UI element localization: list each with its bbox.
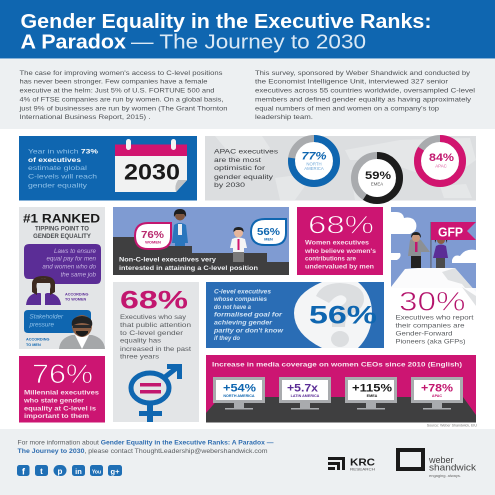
caption: non-C-level executives: interested in attaining a C-level position — [119, 265, 258, 272]
stat: 30% — [391, 286, 476, 348]
donut: North America 77%: NORTH — [306, 162, 322, 166]
donut: North America 77%: 77% — [302, 150, 327, 162]
label: according to women: ACCORDING — [65, 292, 88, 296]
bubble: 56% men: 56% — [257, 227, 280, 238]
text: year in which 73%: estimate global — [28, 165, 88, 172]
intro text: left column: executive at the helm: Just 5% of U.S. FORTUNE 500 and — [20, 88, 215, 94]
text: executives who say: three years — [120, 354, 160, 360]
text: APAC executives: gender equality — [214, 174, 274, 181]
text: C-level executives: parity or don't know — [213, 328, 284, 334]
monitor: Latin America +5.7x: LATIN AMERICA — [291, 394, 320, 398]
text: APAC executives: are the most — [214, 157, 261, 164]
logo: Weber Shandwick: weber — [428, 455, 454, 465]
stat: 68%: 68% — [308, 212, 374, 240]
panel: 76% millennial — [19, 356, 105, 422]
bubble: according to women — [24, 244, 101, 284]
panel: 56% no formalised goal — [206, 282, 384, 348]
source note: Source: Weber Shandwick, EIU — [427, 424, 477, 428]
text: gender-forward pioneers — [396, 314, 474, 346]
label: according to women: TO WOMEN — [65, 298, 86, 302]
donut: EMEA 59%: EMEA — [371, 182, 383, 186]
text: executives who say: that public attention — [120, 322, 191, 329]
figure: woman on podium — [172, 209, 188, 246]
monitor: Latin America +5.7x: +5.7x — [287, 382, 319, 394]
text: executives who say: to C-level gender — [120, 330, 184, 337]
text: executives who say: Executives who say — [120, 314, 187, 321]
text: gender-forward pioneers: Executives who report — [396, 314, 474, 322]
text: year in which 73%: of executives — [28, 157, 81, 164]
world map silhouette — [215, 136, 476, 200]
text: millennial executives: equality at C-level is — [24, 406, 97, 412]
label: according to men: ACCORDING — [26, 338, 49, 342]
text: APAC executives — [214, 148, 279, 189]
figure: man with flag — [408, 232, 430, 268]
text: C-level executives: whose companies — [214, 296, 267, 303]
social icons: f — [22, 466, 26, 478]
text: women executives: contributions are — [305, 256, 357, 262]
text: APAC executives: by 2030 — [214, 182, 245, 189]
monitor: EMEA +115%: EMEA — [367, 394, 378, 398]
donut: North America 77% — [292, 138, 336, 184]
intro text: left column — [18, 70, 228, 121]
text: APAC executives: optimistic for — [214, 165, 266, 172]
figure: woman with flag — [433, 233, 448, 268]
footer contact text — [18, 440, 274, 455]
monitor: APAC +78%: APAC — [432, 394, 442, 398]
donut: APAC 84%: 84% — [429, 152, 454, 164]
white circle with question mark — [294, 282, 372, 348]
intro text: right column — [255, 70, 476, 121]
text: women executives: Women executives — [305, 240, 370, 246]
logo: KRC Research: RESEARCH — [350, 468, 375, 472]
panel: 2030 calendar — [19, 136, 197, 200]
text: year in which 73%: Year in which 73% — [28, 148, 98, 156]
monitor: North America +54% — [213, 377, 265, 410]
monitor: EMEA +115% — [345, 377, 397, 410]
text: year in which 73%: gender equality — [28, 182, 88, 190]
heading: #1 ranked: #1 RANKED — [23, 212, 100, 226]
text: millennial executives: important to them — [24, 413, 90, 420]
title: A Paradox — [20, 32, 126, 54]
intro text: right column: members and defined gender equality as having approximately — [255, 96, 472, 104]
text: APAC executives: APAC executives — [214, 148, 279, 156]
icon: woman — [26, 276, 61, 305]
text: women executives: undervalued by men — [305, 264, 374, 270]
monitor: North America +54%: +54% — [223, 382, 256, 394]
title — [20, 11, 432, 54]
text: C-level executives: if they do — [214, 335, 240, 342]
bubble: 56% men — [251, 219, 286, 245]
panel: 68% public attention — [113, 282, 199, 422]
bubble: according to women: and women who do — [42, 264, 97, 270]
social icons — [17, 465, 122, 478]
mountain — [391, 268, 476, 306]
footer band — [0, 429, 495, 495]
text: C-level executives: C-level executives — [214, 288, 272, 296]
social icons: You — [92, 470, 101, 476]
text: executives who say: equality has — [120, 338, 162, 344]
monitor: North America +54%: NORTH AMERICA — [223, 394, 255, 398]
intro text: right column: executives across 55 countries worldwide, oversampled C-level — [255, 88, 476, 94]
text: millennial executives: who state gender — [23, 398, 85, 404]
title: — The Journey to 2030 — [131, 32, 366, 54]
bubble: according to men — [24, 310, 91, 333]
caption: non-C-level executives — [119, 256, 258, 272]
logo: Weber Shandwick: shandwick — [429, 462, 477, 472]
bubble: according to women: equal pay for men — [46, 256, 97, 262]
text: gender-forward pioneers: Pioneers (aka GFPs) — [396, 338, 466, 346]
panel: #1 ranked tipping point — [19, 207, 105, 349]
bubble: 76% women: 76% — [141, 230, 164, 241]
donut: EMEA 59% — [354, 156, 400, 200]
donut: APAC 84%: APAC — [435, 164, 447, 168]
flag: GFP: GFP — [438, 224, 463, 240]
text: C-level executives: do not have a — [214, 304, 251, 311]
text: women executives — [304, 240, 377, 270]
monitor: APAC +78%: +78% — [421, 382, 453, 394]
text: year in which 73%: C-levels will reach — [28, 174, 97, 180]
figure: man on step — [230, 227, 247, 262]
panel: GFP summit illustration — [391, 207, 476, 306]
footer contact text: For more information about Gender Equality in the Executive Ranks: A Paradox — — [18, 440, 274, 446]
intro text: right column: the Economist Intelligence Unit, interviewed 327 senior — [255, 78, 449, 86]
panel: media coverage increase — [206, 355, 476, 422]
label: according to men: TO MEN — [26, 343, 41, 347]
clouds — [391, 212, 476, 263]
text: gender-forward pioneers: their companies are — [396, 322, 465, 330]
heading: media coverage: Increase in media coverage on women CEOs since 2010 (English) — [212, 362, 462, 368]
panel: regional optimism map — [205, 136, 476, 200]
text: C-level executives: achieving gender — [214, 320, 273, 326]
title: Gender Equality in the Executive Ranks: — [20, 11, 432, 33]
intro text: left column: has never been stronger. Few companies have a female — [20, 78, 208, 86]
text: executives who say: increased in the past — [120, 346, 191, 353]
logo: KRC Research: KRC — [350, 458, 375, 468]
caption: non-C-level executives: Non-C-level executives very — [119, 256, 217, 264]
text: year in which 73% — [28, 148, 98, 190]
intro text: left column: 4% of FTSE companies are run by women. On a global basis, — [20, 96, 224, 104]
bubble: according to women: the same job — [61, 272, 97, 278]
room floor and wall — [206, 397, 476, 422]
podium steps — [113, 237, 289, 275]
text: C-level executives — [213, 288, 284, 342]
logo: Weber Shandwick — [398, 450, 477, 478]
social icons: t — [40, 467, 43, 476]
label: according to women — [65, 292, 88, 302]
icon: calendar — [115, 139, 187, 192]
subheading: tipping point: GENDER EQUALITY — [33, 234, 91, 240]
logo: KRC Research — [328, 457, 375, 472]
panel: C-level ambition podium — [113, 207, 289, 275]
intro text: right column: This survey, sponsored by Weber Shandwick and conducted by — [255, 70, 471, 77]
social icons: p — [58, 467, 63, 476]
monitor: Latin America +5.7x — [279, 377, 331, 410]
bubble: according to men: Stakeholder — [30, 314, 64, 320]
monitor: EMEA +115%: +115% — [352, 382, 392, 394]
intro text: left column: The case for improving women's access to C-level positions — [20, 70, 223, 77]
donut: APAC 84% — [418, 138, 462, 184]
donut: North America 77%: AMERICA — [304, 166, 324, 171]
stat: 76%: 76% — [32, 359, 93, 389]
panel: 68% women undervalued — [297, 207, 383, 275]
text: millennial executives: Millennial executives — [24, 390, 100, 396]
social icons: g+ — [111, 467, 120, 476]
label: according to men — [26, 338, 49, 347]
intro band — [0, 59, 495, 129]
bubble: according to men: pressure — [28, 322, 54, 328]
stat: 68%: 68% — [120, 286, 188, 314]
bubble: according to women: Laws to ensure — [54, 248, 97, 255]
text: millennial executives — [23, 390, 100, 420]
text: executives who say — [120, 314, 191, 360]
icon: man — [59, 315, 105, 349]
stat: 56%: 56% — [309, 302, 377, 330]
footer contact text: The Journey to 2030 , please contact ThoughtLeadership@webershandwick.com — [18, 448, 268, 455]
subheading: tipping point: TIPPING POINT TO — [35, 226, 89, 232]
text: C-level executives: formalised goal for — [214, 312, 283, 318]
intro text: right column: leadership team. — [255, 114, 313, 121]
monitor: APAC +78% — [411, 377, 463, 410]
bubble: 76% women — [135, 223, 171, 249]
icon: gender equality symbol — [131, 364, 182, 422]
intro text: left column: just 9% of businesses are run by women (The Grant Thornton — [18, 106, 228, 112]
bubble: 76% women: WOMEN — [145, 240, 161, 244]
social icons: in — [75, 467, 82, 476]
icon: calendar: 2030 — [124, 160, 180, 184]
logo: Weber Shandwick: engaging. always. — [429, 473, 461, 478]
intro text: right column: equal numbers of men and women on a company's top — [255, 106, 439, 112]
donut: EMEA 59%: 59% — [365, 170, 391, 182]
subheading: tipping point — [33, 226, 91, 240]
header banner — [0, 0, 495, 58]
intro text: left column: International Business Report, 2015) . — [20, 114, 151, 121]
stat: 30%: 30% — [399, 286, 466, 316]
text: gender-forward pioneers: Gender-Forward — [396, 330, 453, 338]
bubble: 56% men: MEN — [264, 238, 273, 242]
text: women executives: who believe women's — [304, 248, 377, 255]
